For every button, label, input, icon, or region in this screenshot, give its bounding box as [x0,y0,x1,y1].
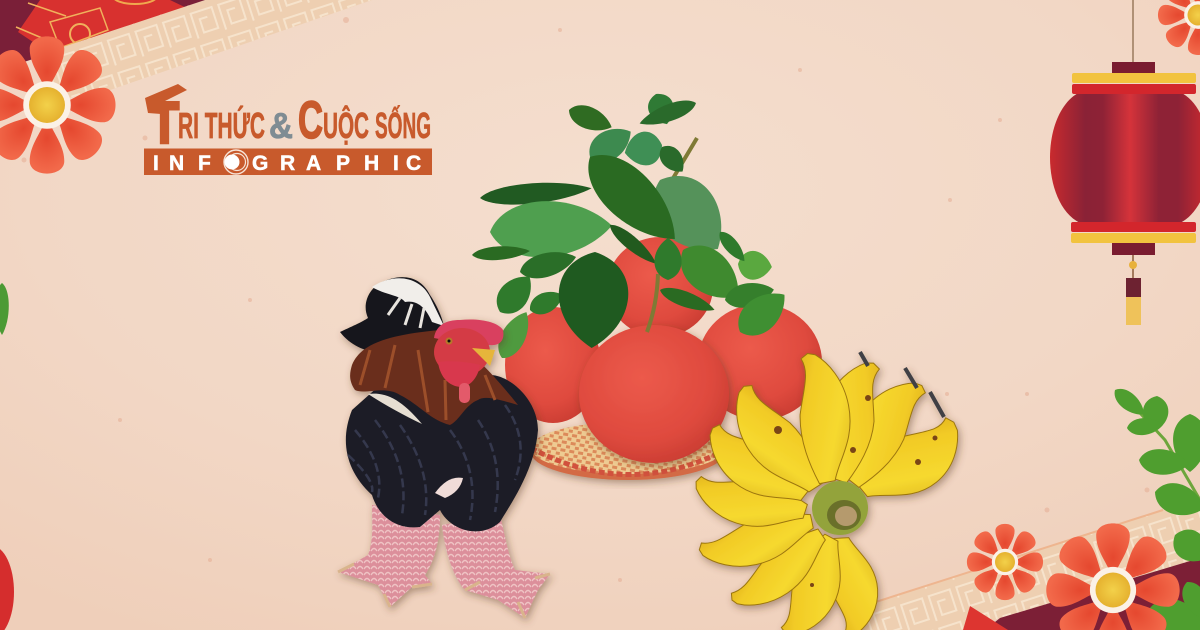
banana crown [812,481,868,535]
left edge leaf [0,283,9,335]
logo roof mark [145,84,187,114]
logo text: song: SỐNG [375,104,431,146]
top-right flower [1158,0,1200,55]
right pomelo [698,304,822,420]
bar text left: INF [153,152,211,175]
head and comb [434,319,503,403]
neck hackle [350,330,518,425]
infographic bar [144,148,432,175]
logo big C: C [298,91,323,150]
fruit platter [472,90,822,480]
leaves [472,90,795,364]
left leg [338,505,440,607]
left pomelo [505,307,601,423]
logo text: uoc: UỘC [323,104,369,146]
front pomelo [579,325,729,463]
banana stems [860,352,944,417]
logo text: Tri thuc: RI THỨC [178,104,265,146]
stems [647,138,697,332]
back pomelo [607,237,713,337]
left edge red lantern [0,546,14,630]
ornamental band [30,0,372,105]
woven tray [531,422,725,480]
red envelope [16,0,195,60]
banana bunch [688,348,976,630]
hanging lantern [1050,0,1200,325]
right leg [442,515,550,618]
tail feathers [340,277,445,352]
bar text right: GRAPHIC [252,152,421,175]
bottom large flower [1046,523,1180,630]
rooster [338,277,550,618]
banana spots [774,395,938,587]
logo [144,84,432,175]
logo ampersand: & [269,105,293,146]
logo letter T: T [150,91,179,156]
bottom small flower [967,524,1043,600]
red envelope corner [963,606,1008,630]
right green branch [1110,384,1200,630]
bananas [688,348,976,630]
bar icon [224,150,248,174]
top-left corner decoration [0,0,372,105]
chest white feathers [435,478,463,498]
top-left flower [0,36,116,174]
body plumage [346,375,538,531]
maroon corner [985,558,1200,630]
bottom-right band [860,500,1200,630]
